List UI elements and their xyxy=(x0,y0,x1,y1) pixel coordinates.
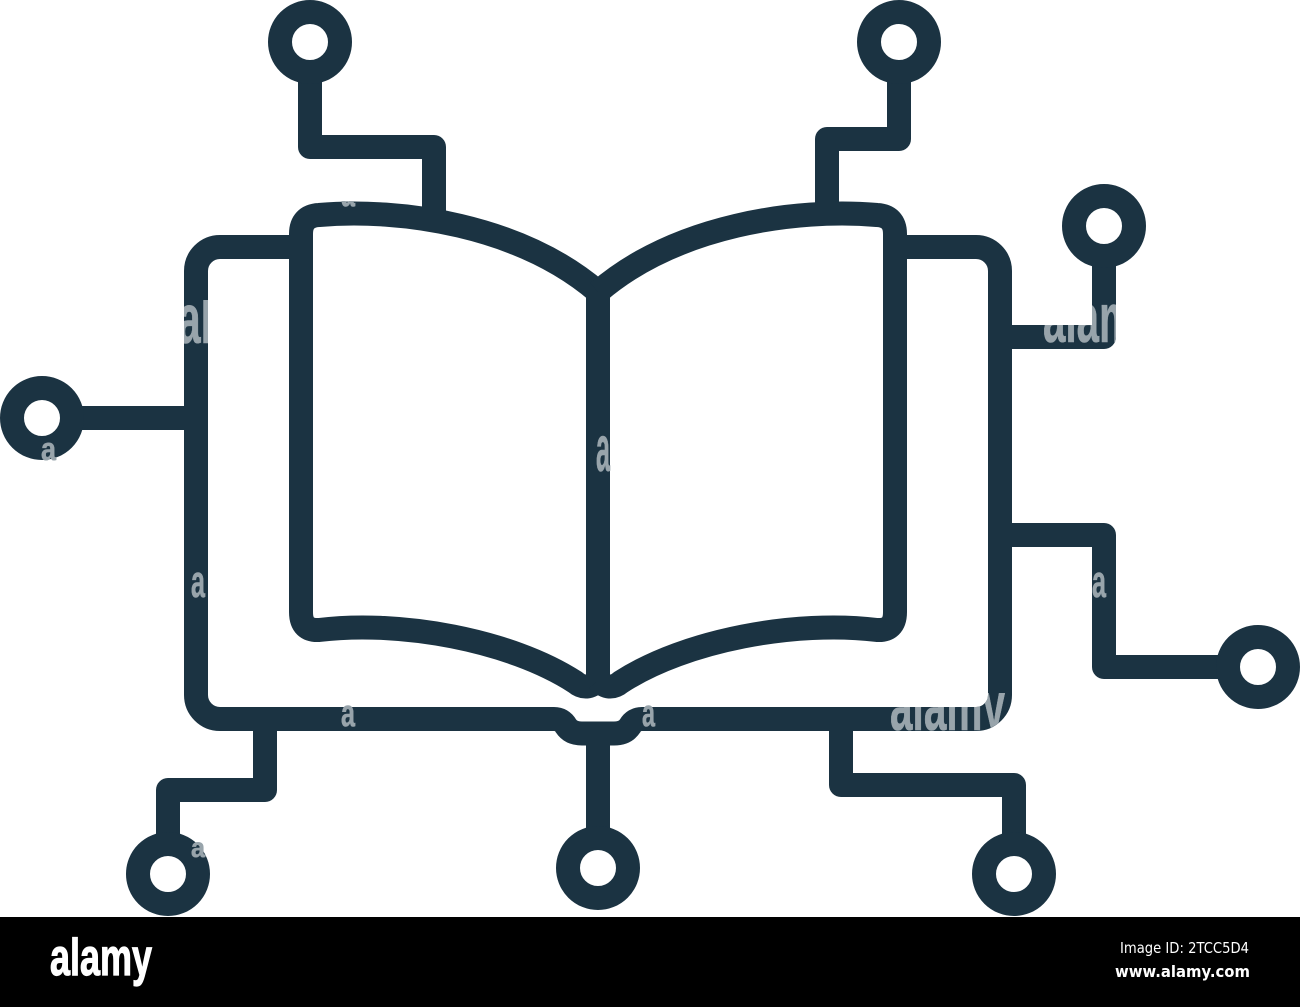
right page xyxy=(598,214,895,687)
node: left xyxy=(12,388,72,448)
watermark fragments: a xyxy=(1092,556,1107,607)
watermark fragments: alam xyxy=(1043,279,1135,357)
connector: left xyxy=(70,406,190,430)
connector: right lower xyxy=(1006,535,1230,667)
watermark fragments: a xyxy=(341,173,356,215)
cover outline xyxy=(196,247,1000,734)
footer logo: alamy xyxy=(50,929,152,987)
spine xyxy=(586,292,610,682)
watermark fragments: a xyxy=(341,693,356,735)
node: bottom left xyxy=(138,844,198,904)
node: right upper xyxy=(1074,196,1134,256)
website: www.alamy.com xyxy=(1115,962,1250,981)
connector: bottom centre xyxy=(586,740,610,840)
watermark fragments xyxy=(41,173,1135,863)
connector: bottom left xyxy=(168,725,265,845)
watermark fragments: a xyxy=(191,832,205,863)
watermark fragments: a xyxy=(642,693,656,735)
connector: right upper xyxy=(1006,250,1104,337)
node: right lower xyxy=(1228,637,1288,697)
watermark fragments: a xyxy=(41,431,56,467)
watermark fragments: alamy xyxy=(890,667,1005,745)
node: top left xyxy=(280,12,340,72)
connector: bottom right xyxy=(841,725,1014,845)
connector: top right xyxy=(827,70,899,206)
watermark fragments: a xyxy=(191,556,206,607)
left page xyxy=(301,214,598,687)
node: bottom right xyxy=(984,844,1044,904)
footer bar xyxy=(0,917,1300,1007)
watermark fragments: a xyxy=(596,412,610,485)
node: top right xyxy=(869,12,929,72)
image id: Image ID: 2TCC5D4 xyxy=(1120,939,1249,957)
connector: top left xyxy=(310,70,434,212)
watermark fragments: al xyxy=(178,280,212,358)
node: bottom centre xyxy=(568,838,628,898)
